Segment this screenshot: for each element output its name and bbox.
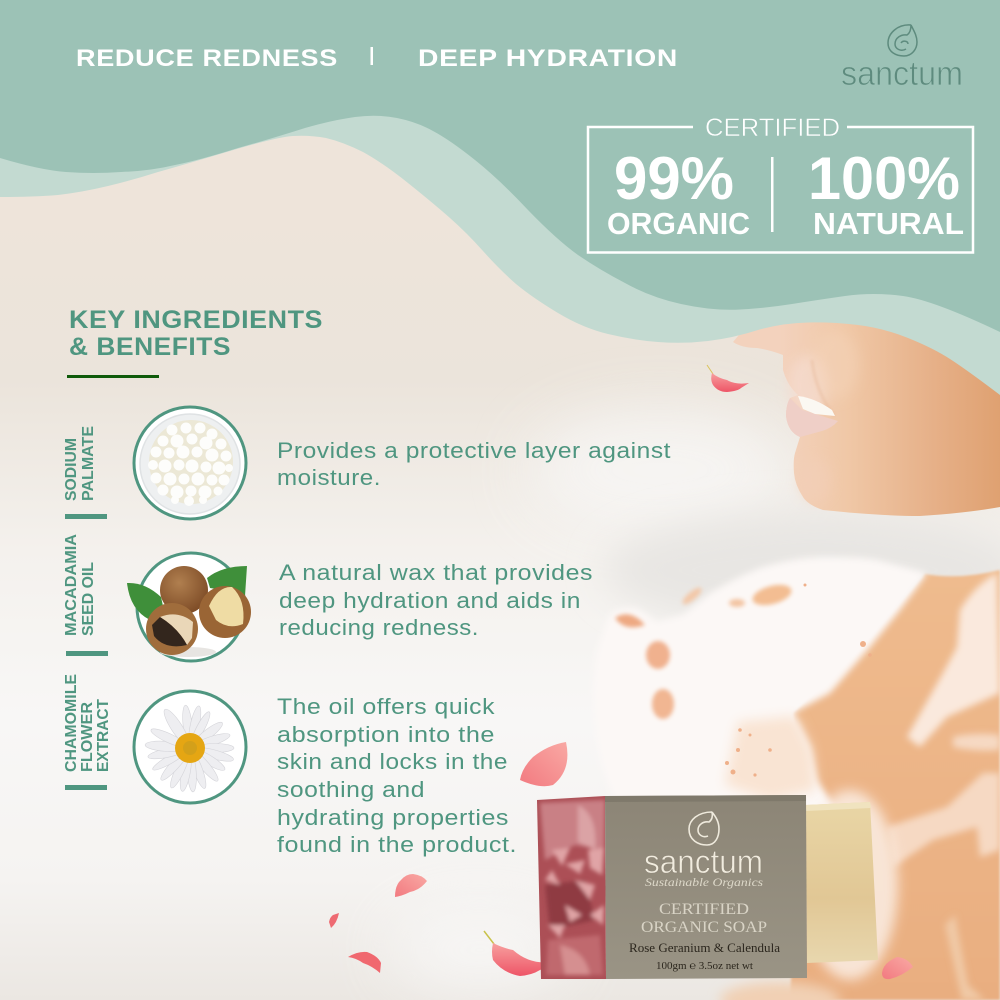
box text: CERTIFIED	[659, 901, 749, 918]
description	[277, 438, 671, 490]
heading: key ingredients: KEY INGREDIENTS	[69, 306, 323, 334]
vertical label	[63, 426, 97, 501]
teeth	[798, 396, 835, 416]
icon: shell	[888, 25, 917, 56]
vertical label: FLOWER	[79, 702, 96, 772]
ingredient 1: sodium palmate	[63, 407, 671, 519]
description: absorption into the	[277, 722, 495, 747]
box text: sanctum	[644, 843, 763, 880]
box flower panel	[537, 796, 606, 979]
heading underline	[67, 375, 159, 378]
box text: ORGANIC SOAP	[641, 919, 767, 936]
label bar	[66, 651, 108, 656]
headline benefits	[76, 45, 678, 72]
photo: shoulder skin	[720, 570, 1000, 1000]
lips	[786, 398, 838, 437]
vertical label: PALMATE	[80, 426, 97, 501]
photo: face	[733, 310, 1000, 516]
logo: sanctum	[841, 25, 963, 93]
label bar	[65, 514, 107, 519]
photo: foam	[593, 557, 1000, 1000]
description: moisture.	[277, 465, 381, 490]
heading: key ingredients	[67, 306, 323, 378]
ingredient 2: macadamia seed oil	[63, 534, 593, 661]
description: soothing and	[277, 777, 425, 802]
petal: near nose	[707, 365, 749, 392]
description: reducing redness.	[279, 615, 479, 640]
petal: lower left	[348, 952, 381, 973]
certified badge: NATURAL	[813, 206, 964, 241]
vertical label	[63, 534, 97, 636]
vertical label: CHAMOMILE	[63, 674, 80, 772]
box text: Rose Geranium & Calendula	[629, 940, 780, 955]
certified badge: 100%	[808, 145, 960, 212]
label bar	[65, 785, 107, 790]
product: soap box	[537, 795, 807, 979]
heading: key ingredients: & BENEFITS	[69, 333, 231, 361]
box text: Sustainable Organics	[645, 877, 764, 889]
logo: sanctum: sanctum	[841, 55, 963, 93]
certified badge	[588, 114, 973, 252]
certified badge: ORGANIC	[607, 206, 750, 241]
description: A natural wax that provides	[279, 560, 593, 585]
box text	[629, 843, 780, 972]
product: soap bar	[806, 802, 878, 963]
petal: leaf shaped	[484, 931, 552, 976]
description: hydrating properties	[277, 805, 509, 830]
vertical label: EXTRACT	[95, 699, 112, 772]
box grey panel	[605, 795, 807, 979]
box text: 100gm ℮ 3.5oz net wt	[656, 961, 753, 972]
box logo	[689, 812, 719, 845]
icon: daisy	[134, 691, 246, 803]
description: skin and locks in the	[277, 749, 508, 774]
decorative wave: dark	[0, 0, 1000, 332]
certified badge: CERTIFIED	[705, 114, 840, 142]
vertical label: SEED OIL	[80, 562, 97, 636]
vertical label	[63, 674, 112, 772]
decorative wave: light	[0, 0, 1000, 395]
description: Provides a protective layer against	[277, 438, 671, 463]
icon: palmate pellets	[134, 407, 246, 519]
icon: macadamia nuts	[127, 553, 251, 661]
vertical label: SODIUM	[63, 438, 80, 501]
description	[279, 560, 593, 640]
ingredient 3: chamomile flower extract	[63, 674, 517, 857]
certified badge: 99%	[614, 145, 734, 212]
vertical label: MACADAMIA	[63, 534, 80, 636]
petal: centre	[395, 874, 427, 897]
description: The oil offers quick	[277, 694, 495, 719]
petal: small	[329, 913, 339, 928]
description	[277, 694, 517, 857]
petal: right of soap	[882, 957, 913, 979]
petal: large	[520, 742, 567, 786]
headline benefits: DEEP HYDRATION	[418, 45, 678, 72]
description: deep hydration and aids in	[279, 588, 581, 613]
divider	[771, 157, 774, 232]
headline benefits: REDUCE REDNESS	[76, 45, 338, 72]
separator	[370, 47, 373, 65]
description: found in the product.	[277, 832, 517, 857]
